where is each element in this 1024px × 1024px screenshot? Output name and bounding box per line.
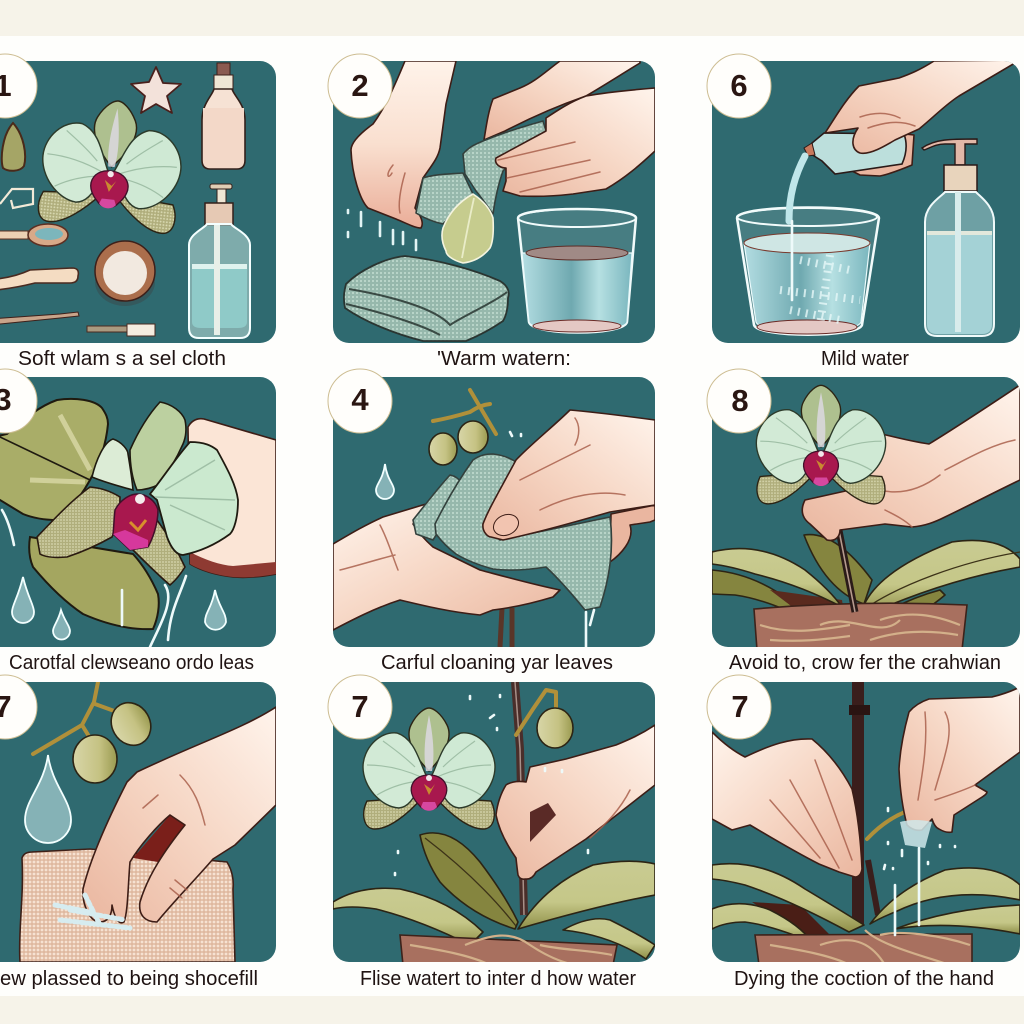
icon: thin brush [0, 312, 79, 325]
leaves [712, 864, 1020, 942]
right petal [150, 442, 238, 555]
panel: cloth in palm [333, 377, 655, 647]
caption row 2: Carful cloaning yar leaves [381, 652, 613, 674]
badge 7 left [0, 675, 37, 739]
cloth [413, 454, 612, 610]
back hand [484, 61, 640, 140]
badge 7 middle [328, 675, 392, 739]
caption row 3: ew plassed to being shocefill [0, 968, 258, 990]
badge 4: 4 [351, 382, 369, 417]
lower leaf [29, 537, 159, 629]
icon: star [131, 67, 181, 113]
right hand [899, 687, 1020, 832]
droplet [376, 464, 394, 499]
caption row 3: Dying the coction of the hand [734, 968, 994, 990]
caption row 1: 'Warm watern: [437, 348, 571, 370]
left hand [712, 732, 862, 877]
badge 6 [707, 54, 771, 118]
pot with roots [755, 930, 972, 965]
back fingers [850, 134, 914, 176]
right under fingers [610, 505, 655, 562]
caption row 2 [9, 652, 1001, 674]
lip [113, 494, 158, 550]
small left petal [92, 439, 133, 490]
panel: drying with hands [712, 682, 1020, 965]
step number badges [0, 54, 771, 739]
badge 2: 2 [351, 68, 369, 103]
suds [55, 895, 130, 928]
icon: hex tag [0, 189, 33, 208]
badge 3 [0, 369, 37, 433]
caption row 3 [0, 968, 994, 990]
pump bottle [922, 139, 994, 336]
hand [83, 707, 276, 923]
badge 4 [328, 369, 392, 433]
hand [496, 725, 655, 879]
left hand [351, 61, 456, 228]
badge 7 right: 7 [731, 689, 749, 724]
caption row 1 [18, 348, 909, 370]
stem [849, 682, 878, 925]
water drips [348, 210, 416, 250]
buds on stem [33, 682, 158, 783]
towel stack [344, 256, 509, 341]
icon: pump bottle [189, 184, 250, 338]
icon: toothbrush [87, 324, 155, 336]
orchid bloom [756, 385, 886, 504]
leaf [442, 194, 493, 263]
pouring stream [789, 156, 805, 221]
lower sepals [37, 487, 120, 557]
water specks [395, 695, 588, 875]
stem [515, 682, 524, 915]
icon: orchid [36, 94, 187, 235]
towel [20, 849, 235, 962]
glass of water [518, 209, 636, 332]
caption row 2: Carotfal clewseano ordo leas [9, 652, 254, 674]
large glass [737, 208, 879, 335]
bud [516, 690, 573, 748]
icon: bud [2, 123, 25, 171]
caption row 1: Soft wlam s a sel cloth [18, 348, 226, 370]
panel: wiping leaf with cloth [333, 61, 655, 343]
icon: bowl of salt [95, 241, 155, 306]
caption row 1: Mild water [821, 348, 909, 370]
upper hand [483, 410, 655, 540]
arm and hand [802, 385, 1020, 540]
badge 6: 6 [730, 68, 748, 103]
drips [510, 432, 594, 647]
panel: towel and droplet [0, 682, 276, 962]
badge 7 middle: 7 [351, 689, 369, 724]
icon: wooden spoon [0, 224, 68, 246]
droplets [2, 510, 226, 647]
water drip [884, 808, 955, 935]
stem and buds [429, 390, 512, 647]
front hand [496, 88, 655, 196]
badge 1 [0, 54, 37, 118]
cloth [416, 121, 546, 224]
badge 8: 8 [731, 383, 749, 418]
large leaf [0, 399, 108, 520]
caption row 2: Avoid to, crow fer the crahwian [729, 652, 1001, 674]
orchid bloom [363, 708, 495, 829]
icon: cream bottle [202, 63, 245, 169]
badge 2 [328, 54, 392, 118]
icon: spatula [0, 268, 78, 290]
pot with roots [400, 935, 617, 965]
panel: supplies [0, 61, 276, 343]
arm [188, 419, 276, 577]
panel: mild water pour [712, 60, 1020, 343]
leaves [712, 535, 1020, 624]
stem [834, 505, 855, 612]
panel: orchid and plant rinse [333, 682, 655, 965]
pot with roots [754, 603, 967, 650]
dorsal petal [130, 402, 186, 490]
hand [825, 60, 1020, 153]
badge 8 [707, 369, 771, 433]
yellow shoot [867, 812, 905, 839]
badge 7 right [707, 675, 771, 739]
panel: cleaning orchid leaves [0, 377, 276, 647]
lower hand [333, 504, 560, 630]
gap behind hand [133, 815, 186, 862]
leaves [333, 833, 655, 959]
caption row 3: Flise watert to inter d how water [360, 968, 636, 990]
droplet [25, 755, 71, 843]
panel: holding bloom over plant [712, 377, 1020, 650]
bottle [804, 133, 906, 174]
orchid bloom [37, 402, 238, 585]
